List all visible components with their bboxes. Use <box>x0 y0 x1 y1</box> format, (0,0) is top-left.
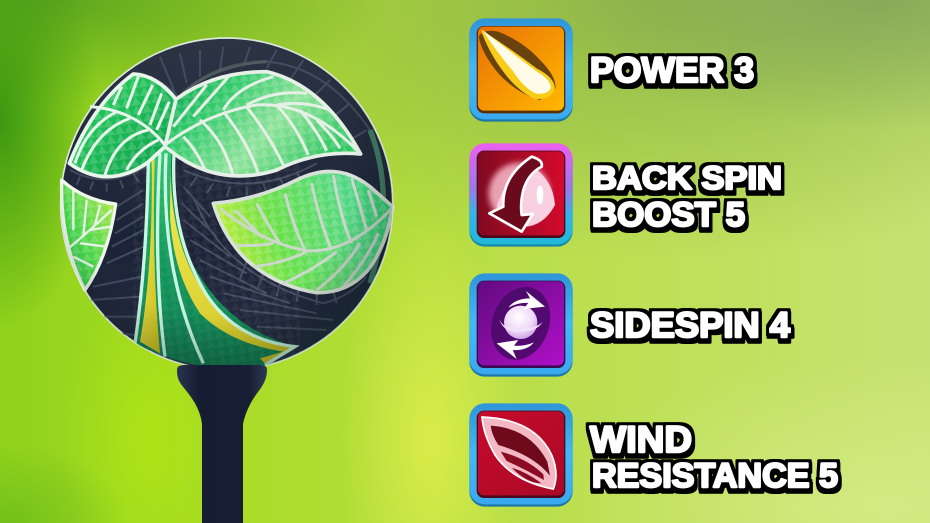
veins <box>165 75 358 174</box>
upper right tread highlight <box>178 62 267 98</box>
ball base and rim <box>61 38 393 370</box>
icon: back spin boost <box>469 143 573 247</box>
right lower leaf <box>213 171 393 293</box>
icon: sidespin <box>469 273 573 377</box>
icon: wind resistance <box>469 403 573 507</box>
yellow left stripe <box>140 158 160 353</box>
left lower leaf <box>62 180 116 290</box>
icon: power comet <box>469 18 573 122</box>
yellow right swoosh <box>170 158 295 365</box>
upper left leaf <box>69 74 176 177</box>
label: Sidespin 4: SIDESPIN 4 <box>590 306 791 345</box>
golf ball <box>61 38 393 377</box>
golf tee <box>177 365 267 523</box>
comet <box>479 29 555 100</box>
feather wing <box>482 417 556 489</box>
right edge green rim <box>370 130 383 283</box>
veins <box>220 175 392 290</box>
spinning ball <box>481 279 560 368</box>
trunk and swoosh <box>133 143 300 377</box>
trunk outlines <box>135 153 295 365</box>
label: Wind Resistance 5: WIND <box>590 419 692 460</box>
label line two: RESISTANCE 5 <box>592 457 838 495</box>
tread lines on dark shell <box>70 47 370 335</box>
veins <box>75 77 176 175</box>
ball edge shading <box>61 38 393 370</box>
label: Power 3: POWER 3 <box>590 51 754 90</box>
label line two: BOOST 5 <box>592 196 745 234</box>
ball with arrow <box>489 157 555 232</box>
veins <box>67 190 112 267</box>
label: Back Spin Boost 5: BACK SPIN <box>592 160 782 196</box>
upper right leaf <box>165 72 361 176</box>
